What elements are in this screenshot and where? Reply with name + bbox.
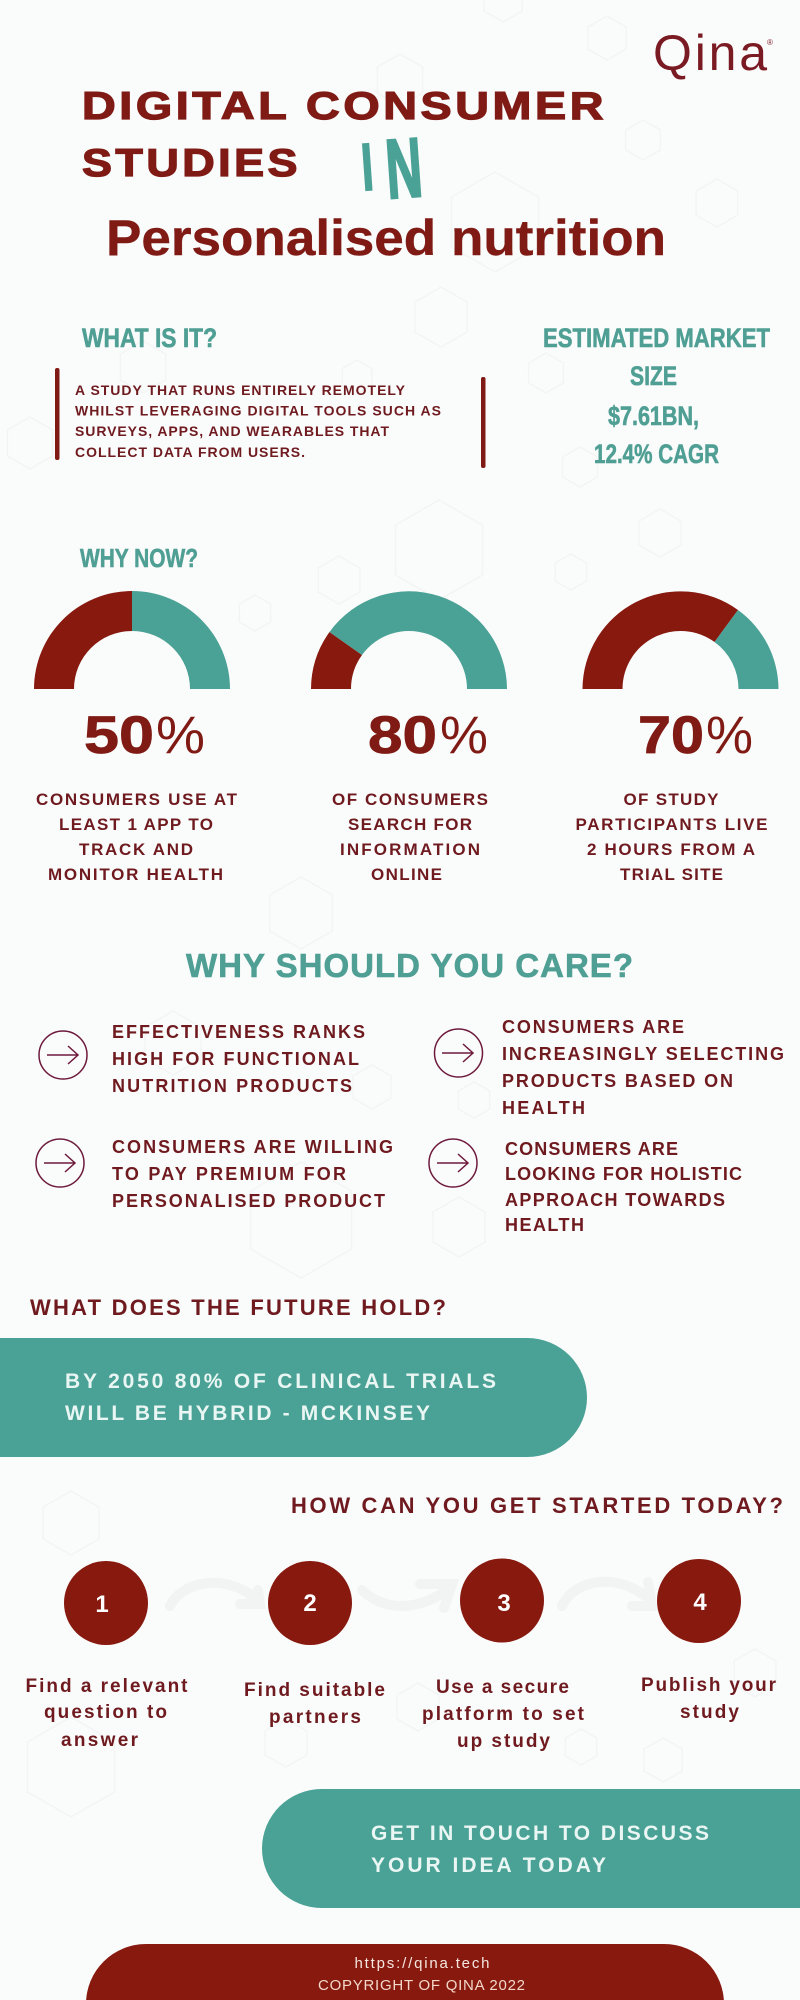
gauge 50% bbox=[34, 591, 230, 689]
gauge 80% bbox=[311, 591, 507, 689]
gauge 70% bbox=[582, 591, 778, 689]
panel: reason 1: NUTRITION PRODUCTS bbox=[112, 1076, 352, 1096]
subtitle: Personalised nutrition bbox=[106, 210, 666, 266]
number 70% bbox=[638, 706, 753, 765]
callout: future prediction bbox=[0, 1338, 587, 1457]
panel: reason 4: APPROACH TOWARDS bbox=[505, 1190, 725, 1210]
divider bar bbox=[481, 377, 486, 468]
panel: reason 4: HEALTH bbox=[505, 1215, 584, 1235]
step circle 4 bbox=[657, 1559, 741, 1643]
panel: reason 3: CONSUMERS ARE WILLING bbox=[112, 1137, 393, 1157]
panel: reason 4: CONSUMERS ARE bbox=[505, 1139, 678, 1159]
step circle 1: 1 bbox=[95, 1591, 109, 1618]
panel: reason 2 bbox=[434, 1017, 784, 1118]
call to action: YOUR IDEA TODAY bbox=[371, 1854, 606, 1877]
number 50%: 50 bbox=[84, 706, 154, 765]
step 3 bbox=[422, 1558, 585, 1752]
definition text bbox=[75, 382, 441, 460]
caption 70%: 2 HOURS FROM A bbox=[587, 840, 755, 859]
panel: reason 2: CONSUMERS ARE bbox=[502, 1017, 684, 1037]
callout: future prediction: WILL BE HYBRID - MCKINSEY bbox=[65, 1402, 430, 1425]
panel: reason 1: EFFECTIVENESS RANKS bbox=[112, 1022, 365, 1042]
caption 80%: ONLINE bbox=[371, 865, 442, 884]
icon: arrow circle bbox=[429, 1139, 477, 1187]
panel: reason 2: INCREASINGLY SELECTING bbox=[502, 1044, 784, 1064]
caption 50%: CONSUMERS USE AT bbox=[36, 790, 238, 809]
caption 70%: TRIAL SITE bbox=[620, 865, 723, 884]
panel: reason 3: PERSONALISED PRODUCT bbox=[112, 1191, 385, 1211]
caption 70%: PARTICIPANTS LIVE bbox=[576, 815, 768, 834]
step circle 2 bbox=[268, 1561, 352, 1645]
logo: Qina: Qina bbox=[653, 25, 767, 81]
panel: reason 3 bbox=[36, 1137, 393, 1211]
callout: future prediction: BY 2050 80% OF CLINICAL TRIALS bbox=[65, 1370, 496, 1393]
step 3: up study bbox=[457, 1731, 550, 1752]
step 2 bbox=[244, 1561, 385, 1728]
panel: reason 1: HIGH FOR FUNCTIONAL bbox=[112, 1049, 359, 1069]
market size text: SIZE bbox=[630, 361, 677, 391]
step circle 2: 2 bbox=[303, 1590, 317, 1617]
step circle 4: 4 bbox=[693, 1589, 707, 1616]
brush word: IN: I bbox=[359, 129, 375, 204]
number 50% bbox=[84, 706, 205, 765]
step 1: answer bbox=[61, 1730, 139, 1751]
number 80% bbox=[368, 706, 488, 765]
step 2: partners bbox=[269, 1707, 361, 1728]
call to action: GET IN TOUCH TO DISCUSS bbox=[371, 1822, 709, 1845]
heading: what is it: WHAT IS IT? bbox=[82, 323, 217, 353]
caption 50%: MONITOR HEALTH bbox=[48, 865, 223, 884]
title bbox=[82, 85, 666, 266]
market size text: 12.4% CAGR bbox=[594, 439, 719, 469]
brush word: IN: N bbox=[383, 120, 425, 216]
icon: arrow circle bbox=[434, 1029, 482, 1077]
number 70%: 70 bbox=[638, 706, 704, 765]
logo: Qina: ® bbox=[767, 38, 773, 47]
panel: reason 4: LOOKING FOR HOLISTIC bbox=[505, 1164, 742, 1184]
caption 80%: INFORMATION bbox=[340, 840, 480, 859]
number 70%: % bbox=[706, 706, 753, 765]
step 4: study bbox=[680, 1702, 739, 1723]
caption 50% bbox=[36, 790, 238, 884]
icon: arrow circle bbox=[36, 1139, 84, 1187]
caption 80%: SEARCH FOR bbox=[348, 815, 472, 834]
panel: reason 3: TO PAY PREMIUM FOR bbox=[112, 1164, 346, 1184]
footer: https://qina.tech bbox=[354, 1955, 490, 1972]
caption 80% bbox=[332, 790, 488, 884]
title: STUDIES bbox=[82, 142, 301, 185]
market size text: $7.61BN, bbox=[608, 401, 699, 431]
step 1: question to bbox=[44, 1702, 167, 1723]
caption 70% bbox=[576, 790, 768, 884]
panel: estimated market size bbox=[481, 323, 770, 469]
number 80%: 80 bbox=[368, 706, 437, 765]
step circle 3: 3 bbox=[497, 1590, 511, 1617]
step 4: Publish your bbox=[641, 1675, 777, 1696]
panel: reason 2: HEALTH bbox=[502, 1098, 585, 1118]
market size text bbox=[543, 323, 770, 469]
number 80%: % bbox=[440, 706, 488, 765]
caption 80%: OF CONSUMERS bbox=[332, 790, 488, 809]
heading: why should you care: WHY SHOULD YOU CARE? bbox=[186, 947, 633, 984]
step circle 3 bbox=[460, 1558, 544, 1642]
footer bbox=[86, 1944, 724, 2000]
panel: reason 2: PRODUCTS BASED ON bbox=[502, 1071, 733, 1091]
panel: reason 1 bbox=[39, 1022, 365, 1096]
heading: what does the future hold: WHAT DOES THE FUTURE HOLD? bbox=[30, 1295, 446, 1320]
panel: stat 50% bbox=[34, 591, 238, 884]
brush word: IN bbox=[359, 120, 425, 218]
arrow: step 3 to 4 bbox=[562, 1582, 652, 1606]
arrow: step 2 to 3 bbox=[362, 1584, 452, 1608]
panel: stat 70% bbox=[576, 591, 778, 884]
number 50%: % bbox=[156, 706, 205, 765]
definition text: A STUDY THAT RUNS ENTIRELY REMOTELY bbox=[75, 382, 406, 398]
step 2: Find suitable bbox=[244, 1680, 385, 1701]
title: DIGITAL CONSUMER bbox=[82, 85, 607, 128]
definition text: COLLECT DATA FROM USERS. bbox=[75, 444, 305, 460]
icon: arrow circle bbox=[39, 1031, 87, 1079]
caption 70%: OF STUDY bbox=[624, 790, 719, 809]
definition text: SURVEYS, APPS, AND WEARABLES THAT bbox=[75, 423, 389, 439]
arrow: step 1 to 2 bbox=[170, 1583, 260, 1606]
step 4 bbox=[641, 1559, 777, 1723]
panel: what is it bbox=[55, 323, 441, 460]
step circle 1 bbox=[64, 1561, 148, 1645]
caption 50%: TRACK AND bbox=[79, 840, 193, 859]
step 1 bbox=[26, 1561, 188, 1751]
call to action bbox=[262, 1789, 800, 1908]
left accent bar bbox=[55, 368, 60, 460]
footer: COPYRIGHT OF QINA 2022 bbox=[318, 1977, 525, 1994]
heading: why now: WHY NOW? bbox=[80, 543, 198, 573]
step 3: platform to set bbox=[422, 1704, 585, 1725]
definition text: WHILST LEVERAGING DIGITAL TOOLS SUCH AS bbox=[75, 402, 441, 418]
step 3: Use a secure bbox=[436, 1677, 569, 1698]
heading: how can you get started: HOW CAN YOU GET STARTED TODAY? bbox=[291, 1493, 783, 1518]
caption 50%: LEAST 1 APP TO bbox=[59, 815, 213, 834]
panel: reason 4 bbox=[429, 1139, 742, 1235]
panel: stat 80% bbox=[311, 591, 507, 884]
step 1: Find a relevant bbox=[26, 1676, 188, 1697]
